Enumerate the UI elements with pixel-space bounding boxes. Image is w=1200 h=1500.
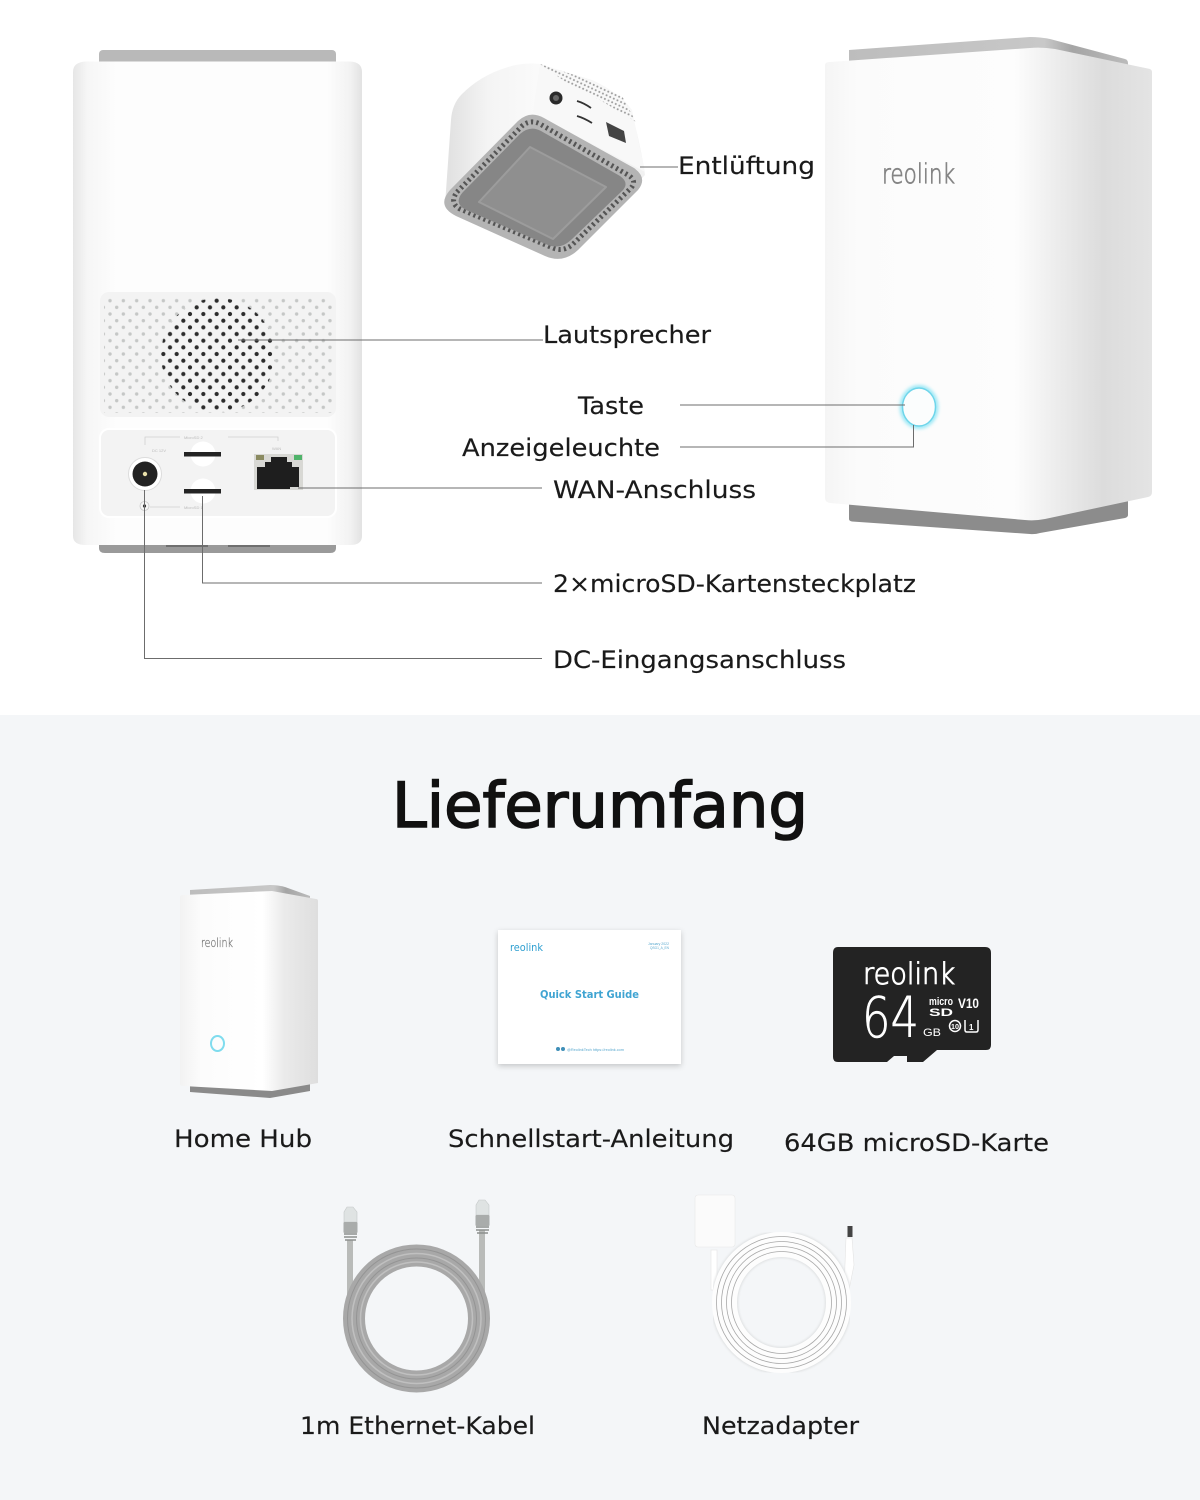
item: microSD card: GB (923, 1027, 941, 1039)
item: Home Hub: reolink (201, 936, 233, 950)
label: Lautsprecher: Lautsprecher (543, 321, 711, 349)
label: Entlüftung: Entlüftung (678, 152, 815, 180)
item: quick start guide (498, 930, 681, 1064)
DC input jack (128, 458, 162, 490)
device: back view with ports (73, 50, 362, 553)
button and indicator ring (902, 388, 936, 426)
item: microSD card: reolink (863, 957, 955, 991)
caption: power adapter: Netzadapter (702, 1412, 859, 1440)
item: Home Hub (180, 885, 318, 1098)
item: quick start guide: January 2022 (648, 942, 669, 946)
label: WAN-Anschluss: WAN-Anschluss (553, 476, 756, 504)
label: microSD slot: 2×microSD-Kartensteckplatz (553, 570, 916, 598)
microSD slot 1 (184, 478, 221, 504)
item: ethernet cable (344, 1200, 490, 1388)
caption: quick start guide: Schnellstart-Anleitung (448, 1125, 734, 1153)
port panel: WAN (272, 446, 281, 451)
item: microSD card (833, 947, 991, 1062)
caption: ethernet cable: 1m Ethernet-Kabel (300, 1412, 535, 1440)
item: microSD card: SD (929, 1007, 953, 1019)
heading: Lieferumfang: Lieferumfang (392, 769, 808, 842)
item: power adapter (695, 1195, 854, 1368)
item: microSD card: 64 (862, 986, 919, 1051)
caption: Home Hub: Home Hub (174, 1125, 312, 1153)
RJ45 WAN port (254, 454, 303, 490)
item: microSD card: 1 (969, 1023, 974, 1032)
port panel: MicroSD 1 (184, 505, 203, 510)
device: front view (825, 37, 1152, 534)
port panel: DC 12V (152, 448, 166, 453)
port panel: MicroSD 2 (184, 435, 203, 440)
item: quick start guide: reolink (510, 941, 544, 954)
item: microSD card: 10 (951, 1024, 959, 1031)
item: microSD card: micro (929, 996, 953, 1008)
label: Taste: Taste (577, 392, 644, 420)
port panel (100, 429, 336, 517)
item: quick start guide: @ReolinkTech https://reolink.com (567, 1047, 625, 1052)
speaker grille (100, 292, 336, 417)
lower package-contents panel (0, 715, 1200, 1500)
item: microSD card: V10 (958, 995, 979, 1011)
white upper background (0, 0, 1200, 715)
item: quick start guide: QSG1_A_EN (650, 946, 669, 950)
leader lines (144, 167, 914, 658)
item: quick start guide: Quick Start Guide (540, 989, 639, 1001)
caption: microSD card: 64GB microSD-Karte (784, 1129, 1049, 1157)
device: underside with ventilation (444, 64, 645, 259)
label: Anzeigeleuchte: Anzeigeleuchte (462, 434, 660, 462)
microSD slot 2 (184, 442, 221, 466)
reset pinhole (140, 502, 149, 510)
brand logo: reolink (882, 159, 955, 190)
vent ring and base plate (444, 115, 642, 259)
label: DC input: DC-Eingangsanschluss (553, 646, 846, 674)
